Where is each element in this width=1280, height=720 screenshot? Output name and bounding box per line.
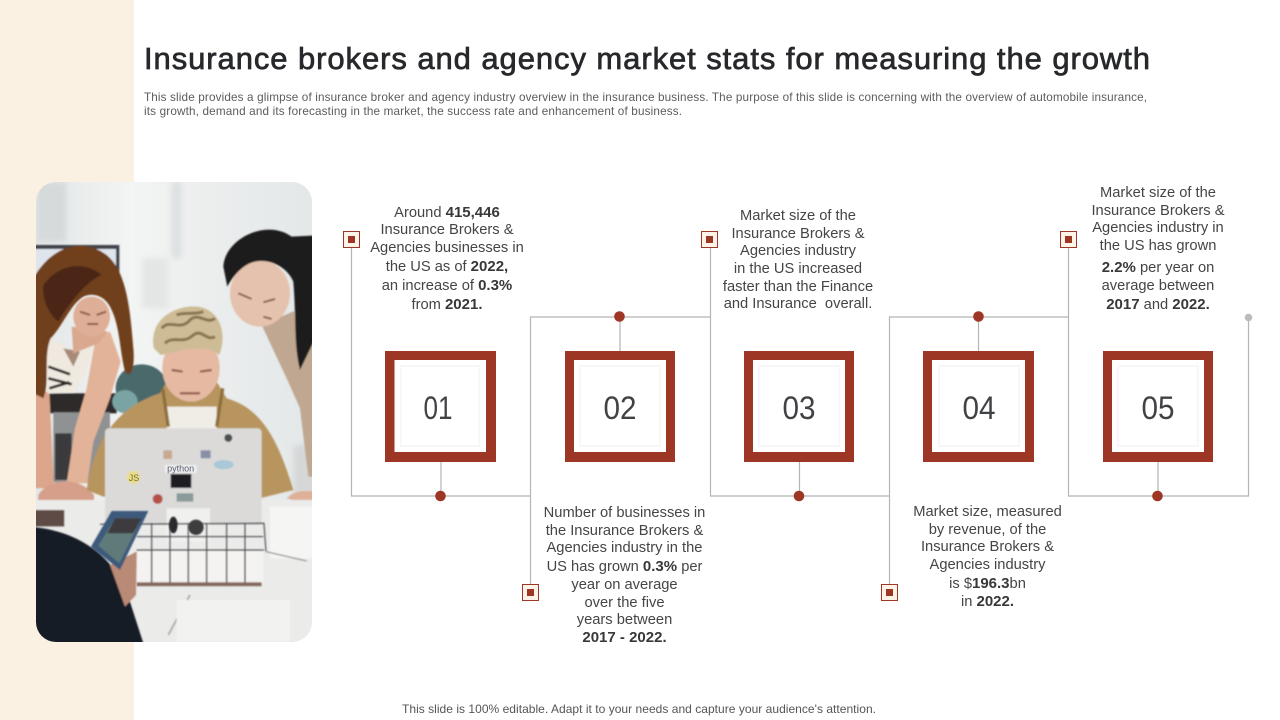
laptop — [105, 428, 262, 525]
marker 01 — [344, 232, 360, 248]
woman left: arms — [36, 390, 54, 490]
connector dot 01 — [435, 491, 446, 501]
woman left: face and hair — [72, 327, 108, 353]
marker 03 — [702, 232, 718, 248]
text 02: year on average — [571, 577, 678, 593]
text 01: the US as of 2022, — [386, 258, 508, 275]
text 01 — [370, 204, 524, 313]
text 03: Agencies industry — [740, 243, 857, 259]
description: its growth, demand and its forecasting in the market, the success rate and enhancement of business. — [144, 105, 682, 118]
text 05 — [1091, 185, 1225, 313]
number box 05: 05 — [1142, 390, 1174, 426]
text 04: Insurance Brokers & — [921, 539, 1054, 555]
person foreground — [30, 527, 145, 648]
text 04: by revenue, of the — [929, 522, 1046, 538]
number box 03 — [744, 351, 854, 462]
step 05 — [1060, 185, 1252, 501]
description: This slide provides a glimpse of insurance broker and agency industry overview in the insurance business. The purpose of this slide is concerning with the overview of automobile insurance, — [144, 91, 1147, 104]
text 03: faster than the Finance — [723, 279, 873, 295]
text 05: Agencies industry in — [1092, 220, 1224, 236]
text 01: Agencies businesses in — [370, 240, 524, 256]
connector dot 05 — [1152, 491, 1163, 501]
man — [87, 382, 293, 498]
step 03 — [702, 208, 873, 501]
title: Insurance brokers and agency market stats for measuring the growth — [144, 41, 1150, 76]
number box 02 — [565, 351, 675, 462]
text 01: Around 415,446 — [394, 204, 500, 221]
connector dot 02 — [614, 311, 625, 322]
text 03: in the US increased — [734, 261, 862, 277]
text 02: over the five — [584, 595, 665, 611]
footer note: This slide is 100% editable. Adapt it to your needs and capture your audience's attention. — [402, 702, 876, 716]
number box 04 — [923, 351, 1034, 462]
connector dot 04 — [973, 311, 984, 322]
text 01: from 2021. — [411, 296, 483, 313]
text 03: and Insurance overall. — [724, 296, 872, 312]
number box 01: 01 — [424, 390, 452, 426]
text 04: in 2022. — [961, 593, 1014, 610]
text 05: the US has grown — [1100, 238, 1216, 254]
number box 03: 03 — [782, 390, 816, 426]
end dot grey — [1245, 314, 1252, 321]
text 05: 2.2% per year on — [1102, 259, 1214, 276]
basket paper — [137, 552, 263, 583]
left cream band — [0, 0, 134, 720]
text 03 — [723, 208, 873, 312]
marker 04 — [882, 584, 898, 600]
number box 02: 02 — [604, 390, 636, 426]
text 01: an increase of 0.3% — [382, 277, 512, 294]
text 02: the Insurance Brokers & — [546, 523, 703, 539]
text 03: Market size of the — [740, 208, 856, 224]
connector dot 03 — [794, 491, 804, 501]
text 04: Market size, measured — [913, 504, 1062, 520]
step 01 — [344, 204, 524, 501]
text 05: 2017 and 2022. — [1106, 296, 1210, 313]
text 02: US has grown 0.3% per — [547, 558, 703, 575]
number box 05 — [1103, 351, 1213, 462]
marker 02 — [522, 584, 538, 600]
text 05: Insurance Brokers & — [1091, 203, 1225, 219]
description — [144, 91, 1147, 118]
table — [30, 500, 323, 648]
number box 01 — [385, 351, 496, 462]
photo: team around a laptop — [30, 175, 323, 648]
woman right — [262, 310, 323, 477]
woman left: top — [46, 335, 95, 394]
text 02: Agencies industry in the — [547, 540, 702, 556]
marker 05 — [1060, 232, 1076, 248]
text 04 — [913, 504, 1062, 610]
text 05: Market size of the — [1100, 185, 1216, 201]
step 04 — [882, 311, 1062, 610]
text 02: Number of businesses in — [544, 505, 705, 521]
wire basket — [100, 523, 307, 583]
step 02 — [522, 311, 705, 646]
woman left: hands — [38, 480, 95, 501]
photo: team around a laptop: JS — [129, 473, 139, 483]
text 04: is $196.3bn — [949, 575, 1026, 592]
text 05: average between — [1102, 278, 1214, 294]
text 03: Insurance Brokers & — [731, 226, 865, 242]
monitor and shelf — [36, 244, 120, 272]
python sticker label: python — [167, 464, 194, 474]
text 02: years between — [577, 612, 672, 628]
connector lines — [352, 247, 1248, 584]
text 01: Insurance Brokers & — [380, 222, 514, 238]
text 02: 2017 - 2022. — [582, 629, 667, 646]
text 04: Agencies industry — [930, 557, 1046, 573]
text 02 — [544, 505, 705, 646]
number box 04: 04 — [962, 390, 996, 426]
